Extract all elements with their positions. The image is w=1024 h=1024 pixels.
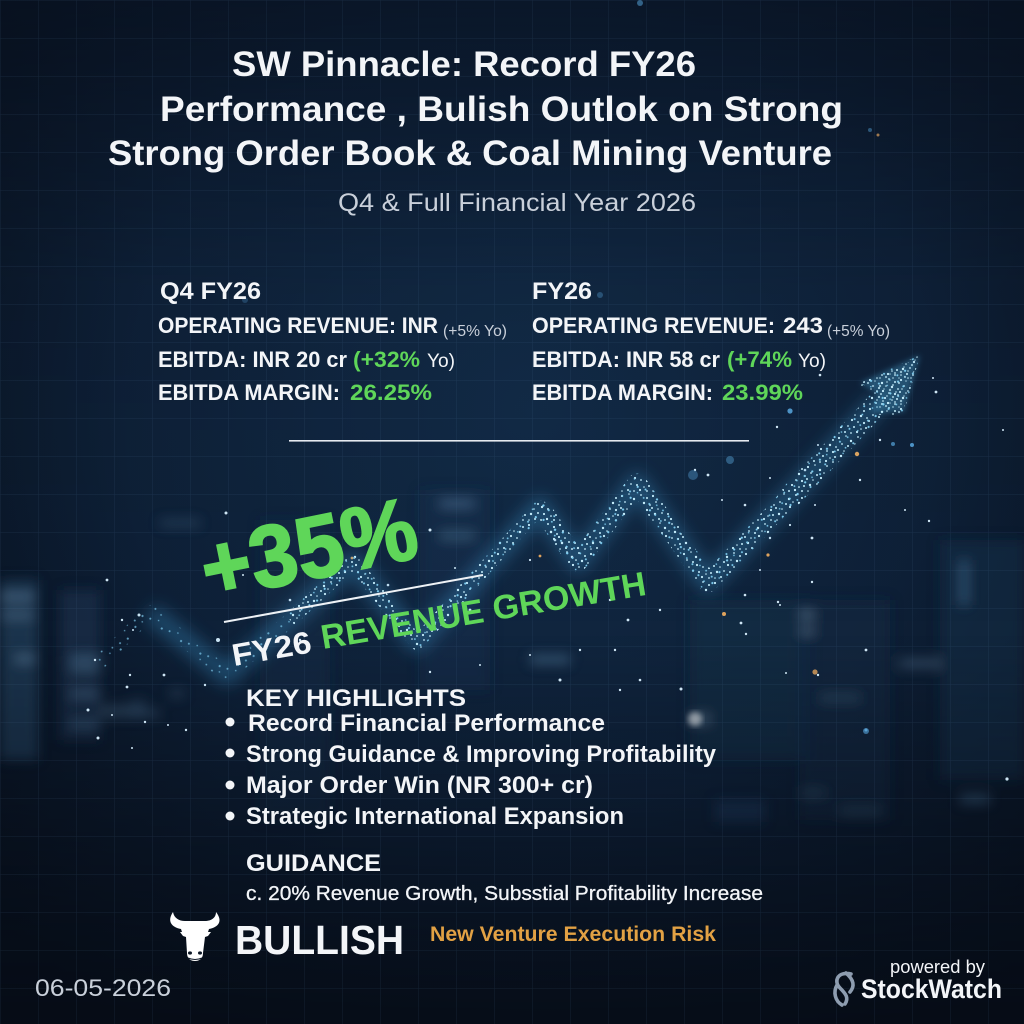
blurred city skyline — [0, 490, 1024, 822]
callout: +35% revenue growth — [192, 478, 649, 673]
panel: FY26 metrics: (+74% — [727, 347, 792, 372]
panel: FY26 metrics: 243 — [783, 313, 823, 338]
panel: FY26 metrics: FY26 — [532, 278, 592, 305]
title — [108, 45, 843, 173]
panel: FY26 metrics: 23.99% — [722, 380, 803, 405]
panel: Q4 FY26 metrics: Q4 FY26 — [160, 278, 261, 305]
panel: Q4 FY26 metrics: OPERATING REVENUE: INR — [158, 313, 438, 338]
panel: Q4 FY26 metrics — [158, 278, 507, 405]
panel: key highlights: Strategic International Expansion — [246, 803, 624, 830]
callout: +35% revenue growth: FY26 — [229, 625, 314, 673]
panel: FY26 metrics: Yo) — [798, 351, 826, 372]
panel: Q4 FY26 metrics: Yo) — [427, 351, 455, 372]
panel: FY26 metrics: OPERATING REVENUE: — [532, 313, 775, 338]
branding: powered by StockWatch: StockWatch — [861, 974, 1002, 1004]
panel: Q4 FY26 metrics: 26.25% — [350, 380, 432, 405]
risk note: New Venture Execution Risk — [430, 923, 716, 946]
scattered light particles — [86, 374, 1009, 781]
chart: glowing dotted rising line with arrow — [100, 355, 920, 675]
panel: key highlights: Strong Guidance & Improving Profitability — [246, 741, 717, 768]
panel: key highlights: Record Financial Performance — [248, 710, 605, 737]
title: Strong Order Book & Coal Mining Venture — [108, 134, 832, 173]
panel: key highlights: Major Order Win (NR 300+ cr) — [246, 772, 593, 799]
panel: FY26 metrics: (+5% Yo) — [827, 323, 890, 340]
panel: guidance: c. 20% Revenue Growth, Subsstial Profitability Increase — [246, 883, 763, 905]
panel: FY26 metrics: EBITDA: INR 58 cr — [532, 347, 720, 372]
branding: powered by StockWatch: powered by — [890, 957, 985, 977]
divider line — [289, 440, 749, 442]
panel: guidance: GUIDANCE — [246, 850, 381, 877]
panel: key highlights — [226, 685, 717, 830]
icon: bull — [170, 912, 220, 961]
subtitle: Q4 & Full Financial Year 2026 — [338, 189, 696, 217]
panel: key highlights: KEY HIGHLIGHTS — [246, 685, 466, 712]
panel: Q4 FY26 metrics: (+32% — [353, 347, 420, 372]
callout: +35% revenue growth: +35% — [192, 478, 425, 619]
branding: powered by StockWatch — [835, 957, 1002, 1005]
panel: FY26 metrics — [532, 278, 890, 405]
callout: +35% revenue growth: REVENUE GROWTH — [318, 565, 649, 657]
title: Performance , Bulish Outlok on Strong — [160, 90, 843, 129]
title: SW Pinnacle: Record FY26 — [232, 45, 696, 84]
verdict: bullish: BULLISH — [235, 917, 404, 963]
panel: Q4 FY26 metrics: EBITDA: INR 20 cr — [158, 347, 347, 372]
panel: guidance — [246, 850, 763, 905]
panel: Q4 FY26 metrics: EBITDA MARGIN: — [158, 380, 340, 405]
panel: FY26 metrics: EBITDA MARGIN: — [532, 380, 713, 405]
panel: Q4 FY26 metrics: (+5% Yo) — [443, 323, 507, 340]
date: 06-05-2026 — [35, 975, 171, 1002]
